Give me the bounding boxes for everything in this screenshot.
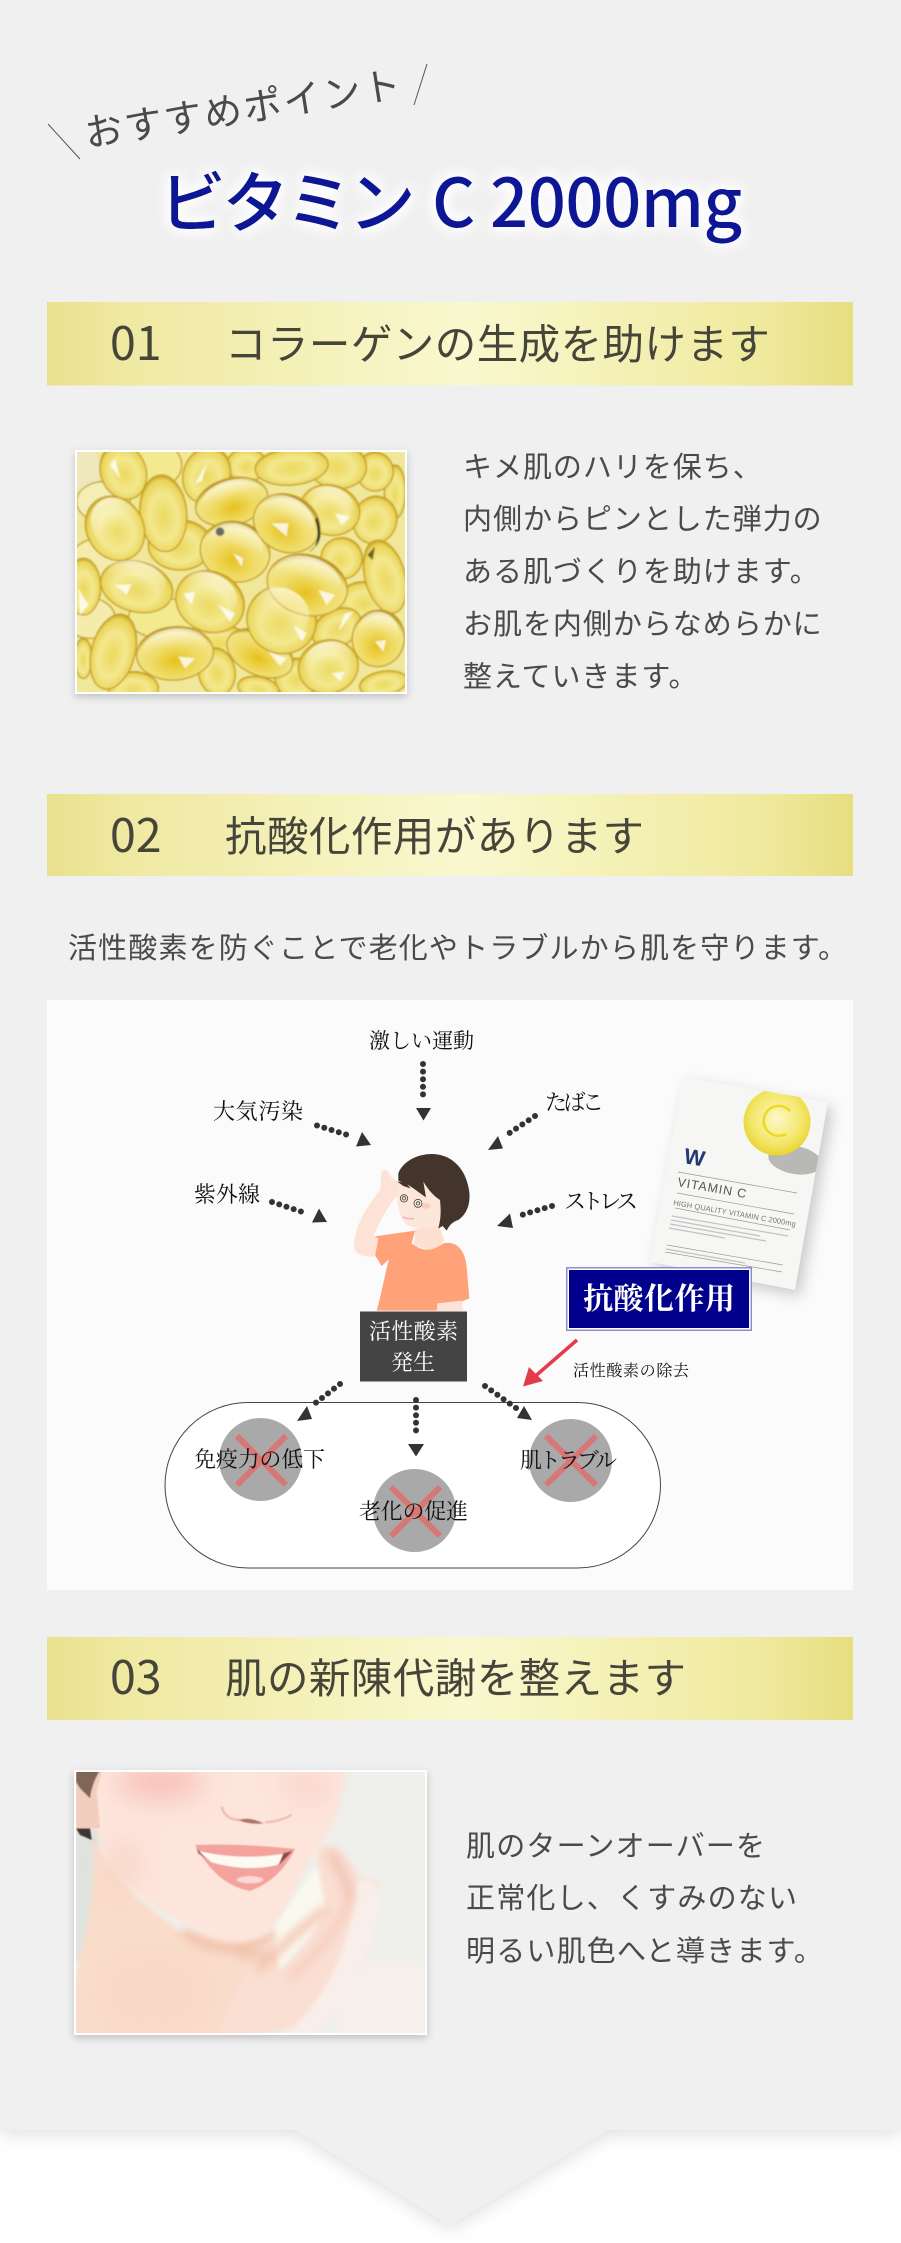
photo: smiling woman	[70, 1763, 437, 2040]
outcome: accelerated aging: 老化の促進	[359, 1495, 468, 1526]
panel: antioxidant diagram	[47, 1000, 853, 1590]
product box: vitamin C	[650, 1077, 833, 1296]
cause: air pollution	[213, 1095, 371, 1146]
text: point 03 body: 明るい肌色へと導きます。	[466, 1928, 824, 1970]
outcome: skin trouble	[520, 1419, 617, 1502]
label: active oxygen generated	[360, 1312, 467, 1382]
heading 02: 抗酸化作用があります	[225, 803, 645, 863]
arrow: removal of active oxygen	[523, 1340, 577, 1386]
arrow: to immunity	[297, 1384, 340, 1421]
heading 01: 01	[110, 307, 162, 374]
badge: antioxidant action: 抗酸化作用	[583, 1274, 735, 1318]
product box: vitamin C: HIGH QUALITY VITAMIN C 2000mg	[673, 1198, 797, 1229]
outcome: reduced immunity: 免疫力の低下	[194, 1443, 325, 1474]
heading 03: 03	[110, 1641, 162, 1708]
cause: ultraviolet	[194, 1178, 327, 1222]
badge: antioxidant action	[566, 1267, 752, 1331]
photo: vitamin capsules	[65, 437, 415, 705]
cause: tobacco: たばこ	[545, 1086, 604, 1117]
illustration: dizzy woman	[354, 1154, 470, 1311]
heading 02: 02	[110, 799, 162, 866]
cause: tobacco	[488, 1086, 604, 1150]
product box: vitamin C: W	[682, 1143, 707, 1172]
title: C	[432, 150, 475, 247]
text: point 03 body: 正常化し、くすみのない	[466, 1875, 798, 1917]
title	[159, 150, 742, 247]
label: recommended point: おすすめポイント	[80, 53, 406, 158]
product box: vitamin C: VITAMIN C	[676, 1175, 748, 1201]
arrow: to aging	[408, 1400, 424, 1456]
label: removal of active oxygen: 活性酸素の除去	[573, 1358, 689, 1381]
cause: stress: ストレス	[564, 1185, 638, 1216]
title: 2000mg	[490, 150, 742, 247]
text: point 03 body	[466, 1823, 824, 1970]
title: ビタミン	[159, 150, 412, 247]
outcome capsule container	[165, 1402, 660, 1568]
text: point 03 body: 肌のターンオーバーを	[466, 1823, 766, 1865]
text: point 01 body: お肌を内側からなめらかに	[463, 601, 823, 643]
label: active oxygen generated: 活性酸素	[369, 1315, 458, 1346]
text: point 01 body: 整えていきます。	[463, 654, 698, 696]
heading 03	[47, 1637, 853, 1720]
heading 01: コラーゲンの生成を助けます	[225, 311, 770, 371]
cause: ultraviolet: 紫外線	[194, 1178, 260, 1209]
text: point 01 body: ある肌づくりを助けます。	[463, 548, 820, 590]
label: active oxygen generated: 発生	[391, 1346, 435, 1377]
text: point 01 body: キメ肌のハリを保ち、	[463, 444, 763, 486]
heading 03: 肌の新陳代謝を整えます	[225, 1645, 686, 1705]
cause: intense exercise: 激しい運動	[369, 1025, 474, 1055]
heading 01	[47, 302, 853, 386]
text: point 01 body: 内側からピンとした弾力の	[463, 496, 823, 538]
cause: stress	[497, 1185, 638, 1228]
heading 02	[47, 794, 853, 876]
outcome: skin trouble: 肌トラブル	[520, 1444, 617, 1475]
cause: air pollution: 大気汚染	[213, 1095, 303, 1126]
outcome: reduced immunity	[194, 1418, 325, 1501]
outcome: accelerated aging	[359, 1469, 468, 1552]
text: point 01 body	[463, 444, 823, 696]
cause: intense exercise	[369, 1025, 474, 1120]
arrow: to skin trouble	[485, 1386, 532, 1420]
text: point 02 lead: 活性酸素を防ぐことで老化やトラブルから肌を守ります。	[68, 925, 848, 967]
